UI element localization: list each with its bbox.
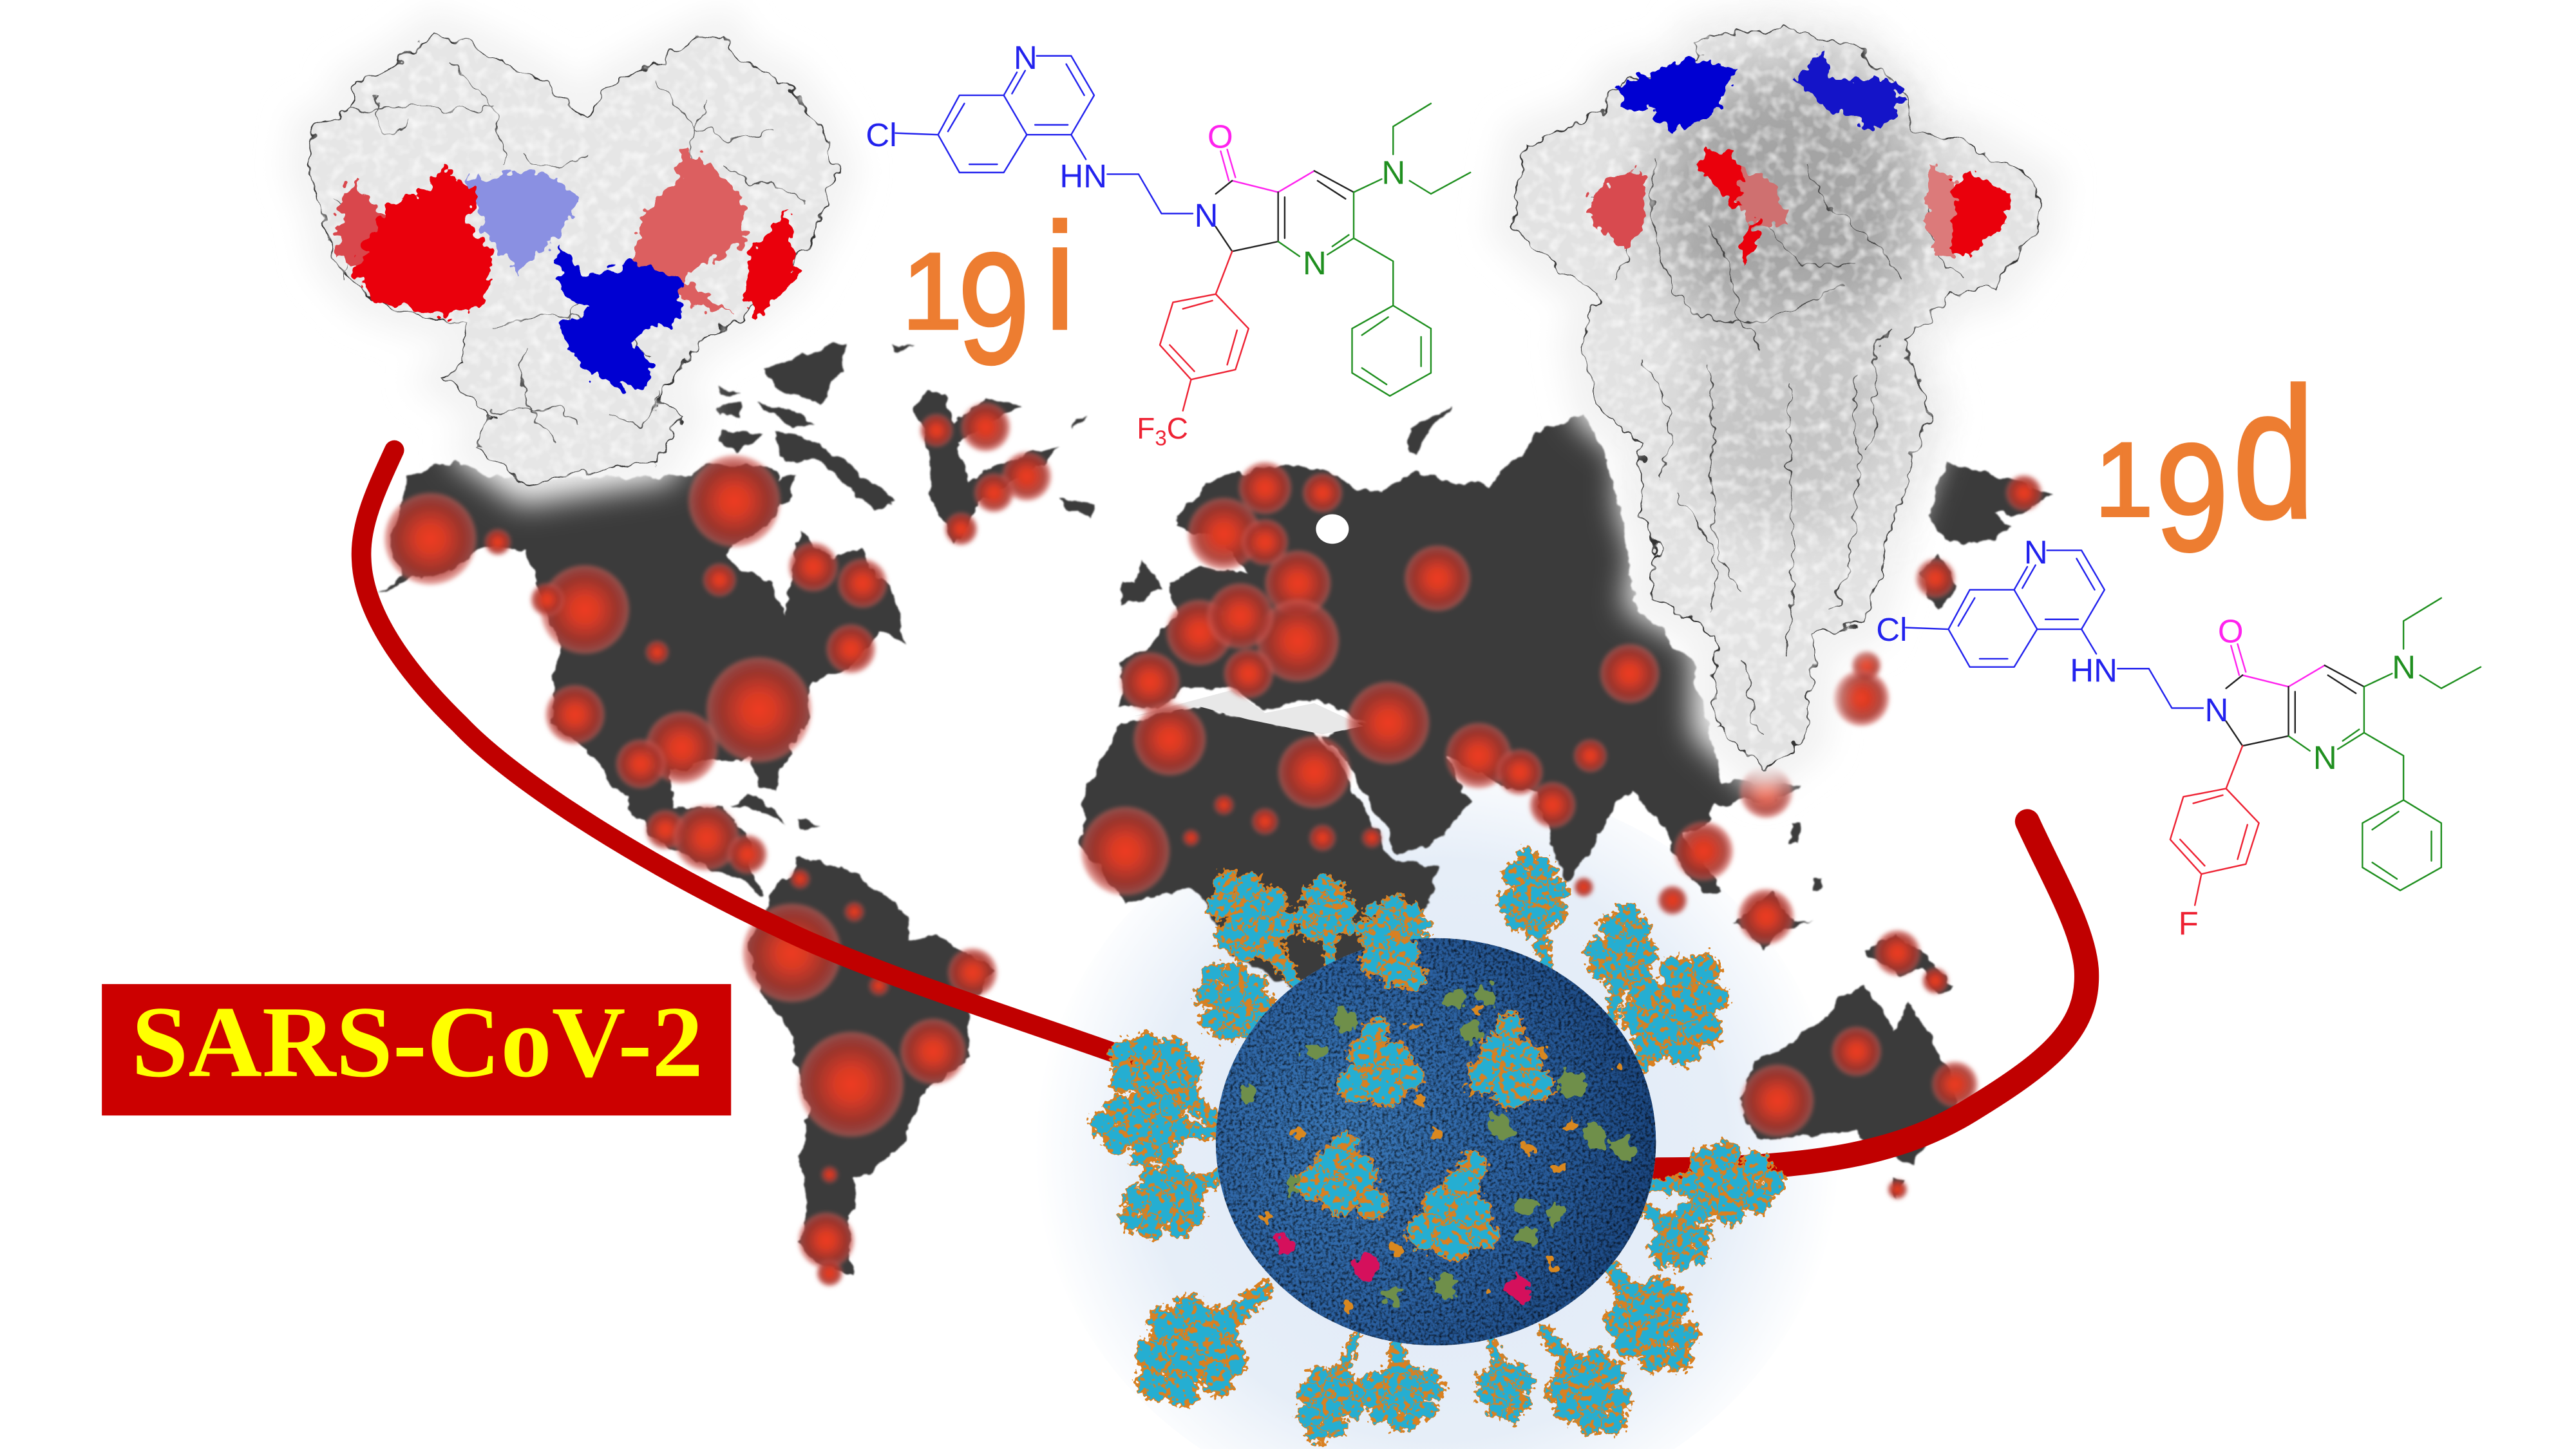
label: 19d: 1 <box>2095 421 2153 538</box>
molecule 19d: F <box>2179 905 2199 942</box>
world map <box>381 342 2052 1286</box>
molecule 19i: F <box>1137 412 1155 445</box>
binding regions <box>337 146 797 391</box>
molecule 19i: N <box>1014 39 1037 76</box>
protein structure: right <box>1513 28 2039 769</box>
label: 19i: i <box>1045 193 1075 361</box>
halo <box>307 33 838 483</box>
label: 19i: 9 <box>958 221 1030 397</box>
molecule 19d: Cl <box>1876 611 1907 648</box>
land masses <box>381 342 2052 1276</box>
fluorinated phenyl <box>1160 251 1249 411</box>
binding regions <box>1592 51 2011 266</box>
baltic gap <box>1316 514 1349 544</box>
molecule 19i: N <box>1381 155 1405 191</box>
lactam <box>2231 644 2325 687</box>
surface proteins <box>1238 986 1634 1311</box>
surface <box>307 33 838 483</box>
molecule 19d: N <box>2392 649 2416 686</box>
molecule 19i: N <box>1195 197 1218 234</box>
coronavirus particle <box>1086 842 1786 1449</box>
left red arc <box>361 450 1133 1059</box>
molecule 19d: HN <box>2070 652 2117 689</box>
molecule 19d <box>1876 534 2481 942</box>
molecule 19i <box>866 39 1470 450</box>
molecule 19d: O <box>2218 612 2244 649</box>
molecule 19i: HN <box>1059 158 1107 194</box>
SARS-CoV-2 banner: SARS-CoV-2 <box>131 986 703 1099</box>
sphere <box>1216 938 1656 1345</box>
halo <box>1513 28 2039 769</box>
molecule 19d: N <box>2024 534 2048 571</box>
molecule 19i: 3 <box>1155 426 1167 450</box>
pyridine and substituents <box>2289 598 2481 891</box>
front spikes <box>1298 909 1553 1260</box>
label: 19i <box>902 193 1075 397</box>
protein structure: left <box>307 33 838 483</box>
lactam <box>1220 149 1314 192</box>
mediterranean <box>1133 690 1363 734</box>
surface <box>1513 28 2039 769</box>
molecule 19i: N <box>1303 245 1327 281</box>
right red arc <box>1658 822 2087 1170</box>
molecule 19i: O <box>1208 118 1233 155</box>
quinoline <box>1906 551 2203 708</box>
quinoline <box>895 56 1193 214</box>
label: 19d: d <box>2233 350 2315 558</box>
virus glow <box>1035 781 1840 1449</box>
molecule 19d: N <box>2313 739 2337 776</box>
pyridine and substituents <box>1278 104 1470 396</box>
molecule 19i: C <box>1167 412 1188 445</box>
outbreak circles <box>384 402 2042 1286</box>
back spikes <box>1086 842 1786 1449</box>
fluorophenyl <box>2170 746 2259 905</box>
label: 19d: 9 <box>2155 412 2228 583</box>
label: 19i: 1 <box>902 231 962 352</box>
molecule 19i: Cl <box>866 117 897 153</box>
molecule 19d: N <box>2204 692 2228 728</box>
label: 19d <box>2095 350 2315 583</box>
